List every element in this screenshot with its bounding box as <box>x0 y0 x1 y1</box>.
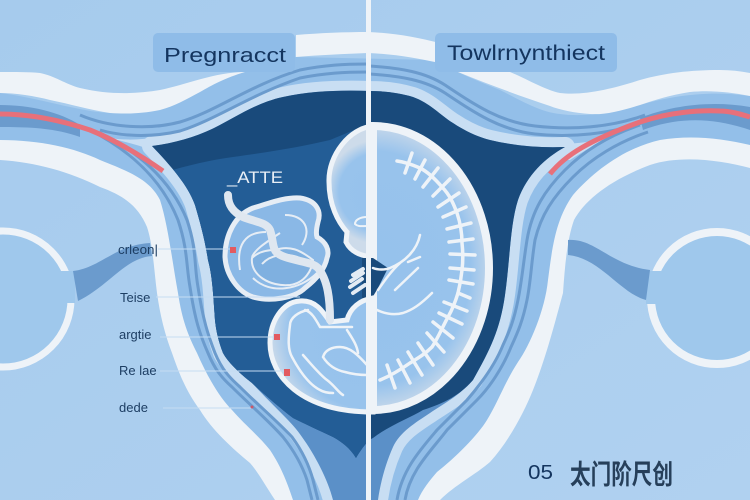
footer number: 05 <box>528 462 553 484</box>
callout: Teise: Teise <box>120 290 150 305</box>
central dark uterus cavity <box>152 90 565 458</box>
lower wall stripes <box>90 125 648 500</box>
tube stripe: right <box>640 104 750 130</box>
callout: argtie: argtie <box>119 327 152 342</box>
center divider <box>366 0 371 500</box>
white wall band: top left <box>0 72 245 114</box>
head and face <box>329 126 373 257</box>
white wall band: top right <box>458 70 750 114</box>
white wall band: top centre <box>296 32 440 63</box>
spine <box>380 161 463 380</box>
footer caption: 太门阶尺创 <box>570 460 673 490</box>
placenta lobe <box>225 198 328 299</box>
callout: crleon: crleon| <box>118 242 158 257</box>
limb outlines <box>289 235 432 395</box>
umbilical cord <box>228 195 330 320</box>
fetus <box>225 126 489 412</box>
heading pill: right: Towlrnynthiect <box>447 42 605 65</box>
right ovary <box>568 232 750 364</box>
gap under chin <box>362 258 388 298</box>
spine ribs <box>387 153 475 388</box>
red line: right <box>550 111 750 174</box>
callout: Re lae <box>119 363 290 378</box>
callout: Re lae: Re lae <box>119 363 157 378</box>
callout: dede: dede <box>119 400 148 415</box>
ear <box>355 217 367 226</box>
upper wall stripes <box>80 64 645 136</box>
red line: left <box>0 114 163 171</box>
light wedge: right corner <box>545 133 620 160</box>
heading pill: right <box>435 33 617 72</box>
heading pill: left: Pregnracct <box>164 45 287 67</box>
white wall band: lower right <box>418 138 750 500</box>
bottom wedge with light cavity lining <box>152 91 565 500</box>
callout: dede <box>119 400 254 415</box>
callout: argtie <box>119 327 280 342</box>
hand <box>350 269 365 293</box>
lower body lobe <box>270 298 373 412</box>
light wedge: left corner <box>110 130 185 160</box>
callout labels <box>118 242 300 415</box>
tube stripe: left <box>0 105 80 137</box>
small label over cavity: _ATTE <box>226 168 283 187</box>
callout: crleon <box>118 242 236 257</box>
white wall band: lower left <box>0 140 293 500</box>
heading pill: left <box>153 33 295 72</box>
back and torso <box>373 126 489 410</box>
left ovary <box>0 231 152 367</box>
placenta inner folds <box>239 215 317 289</box>
